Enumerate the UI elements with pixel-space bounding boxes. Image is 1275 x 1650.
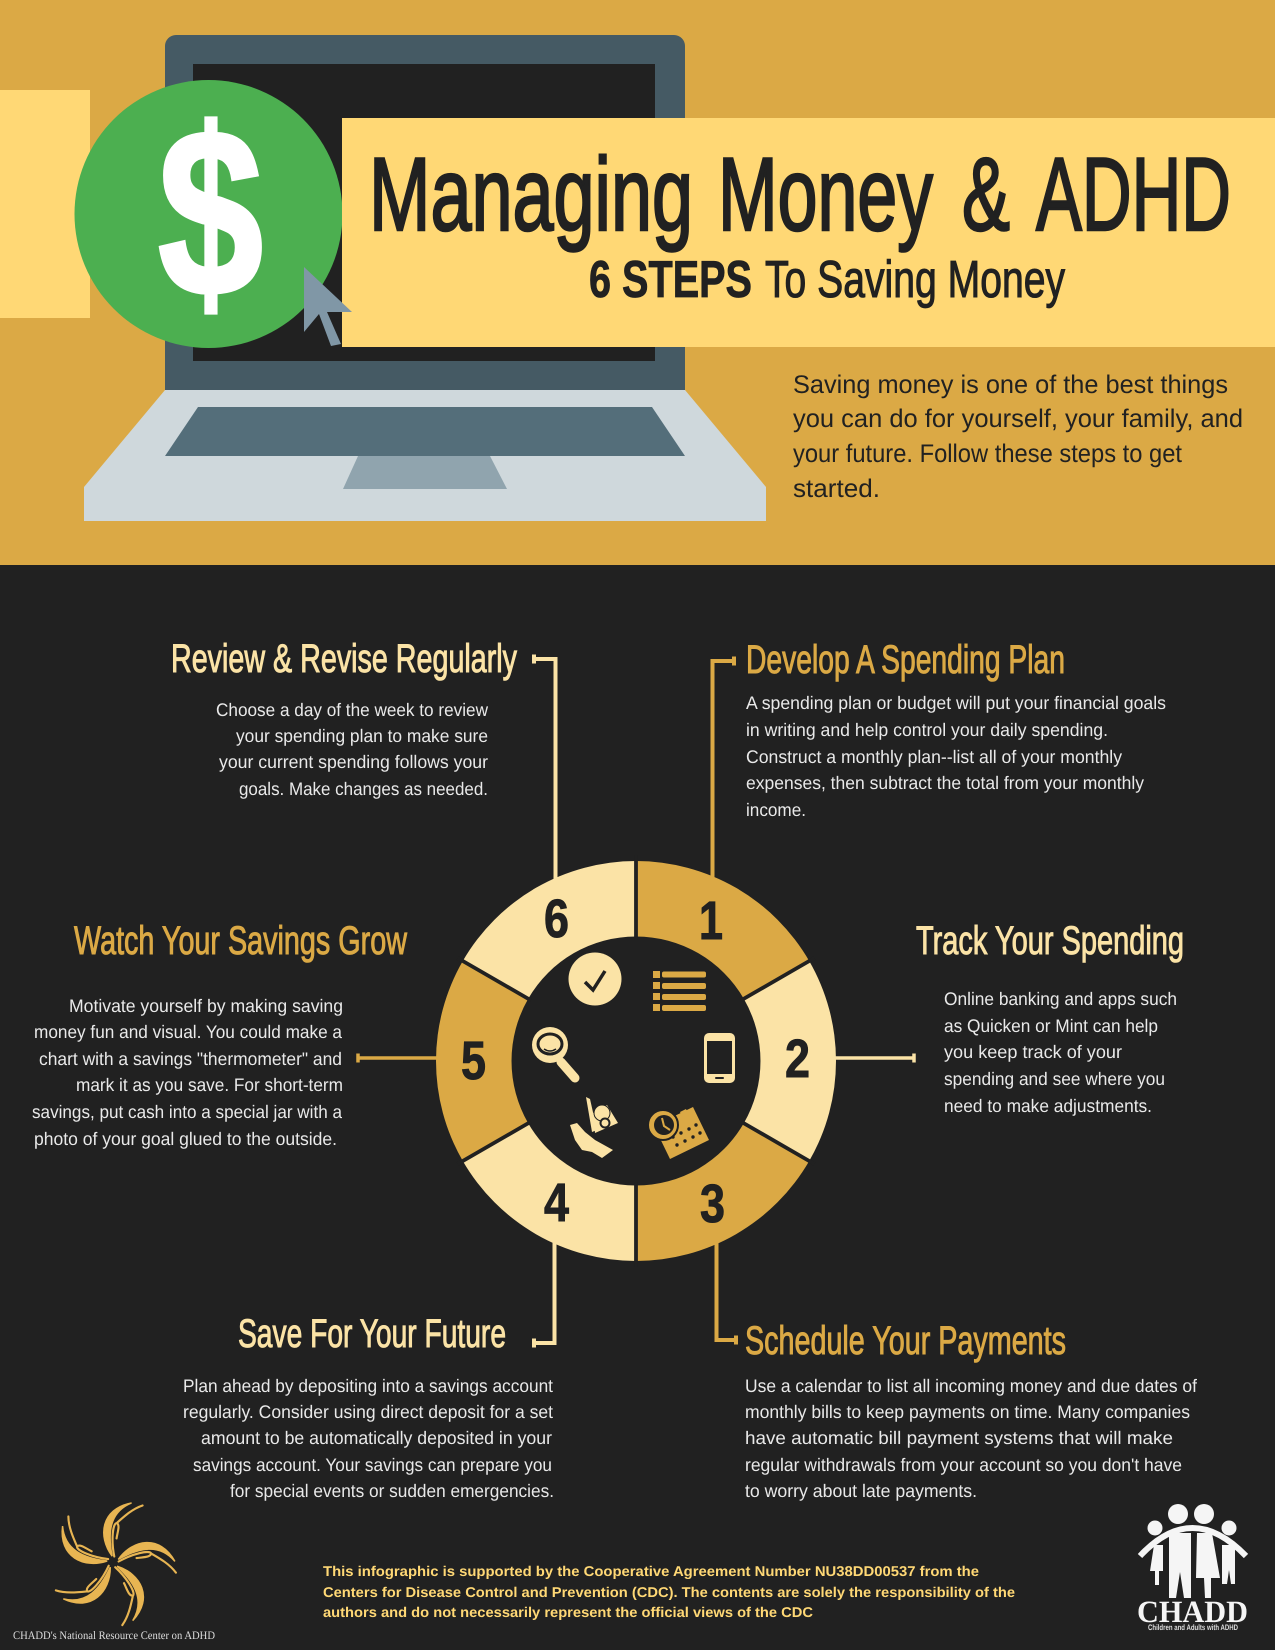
body: review: your current spending follows your: [219, 752, 488, 772]
panel: step 5 savings: [32, 919, 442, 1149]
segment 2: [744, 961, 836, 1161]
segment 1: [636, 861, 809, 999]
body: develop: Construct a monthly plan--list all of your monthly: [746, 747, 1123, 767]
body: review: [216, 700, 489, 799]
body: schedule: have automatic bill payment systems that will make: [745, 1428, 1173, 1448]
segment 6: [463, 861, 636, 999]
heading: schedule: Schedule Your Payments: [745, 1319, 1066, 1363]
body: review: Choose a day of the week to review: [216, 700, 489, 720]
icon: list: [653, 971, 706, 1011]
body: develop: in writing and help control your daily spending.: [746, 720, 1108, 740]
panel: step 3 schedule: [716, 1238, 1198, 1501]
body: review: your spending plan to make sure: [236, 726, 488, 746]
body: develop: A spending plan or budget will put your financial goals: [746, 693, 1166, 713]
body: track: Online banking and apps such: [944, 989, 1177, 1009]
body: watch savings: savings, put cash into a special jar with a: [32, 1102, 343, 1122]
body: watch savings: [32, 996, 343, 1149]
logo: CHADD: [1137, 1504, 1248, 1632]
body: future: amount to be automatically deposited in your: [201, 1428, 552, 1448]
left accent block: [0, 90, 90, 318]
number 4: 4: [544, 1173, 569, 1233]
body: review: goals. Make changes as needed.: [239, 779, 488, 799]
connector 1: [712, 656, 734, 885]
number 5: 5: [461, 1031, 486, 1091]
body: schedule: regular withdrawals from your account so you don't have: [745, 1455, 1182, 1475]
heading: develop: Develop A Spending Plan: [746, 638, 1065, 682]
footer disclaimer: authors and do not necessarily represent the official views of the CDC: [323, 1605, 813, 1621]
title banner: [342, 118, 1275, 347]
intro text: you can do for yourself, your family, and: [793, 405, 1243, 433]
heading: track: Track Your Spending: [916, 919, 1184, 963]
body: future: [183, 1376, 554, 1501]
icon: laptop: [84, 35, 766, 521]
logo: CHADD national resource center: [13, 1500, 215, 1642]
body: watch savings: chart with a savings "thermometer" and: [39, 1049, 342, 1069]
body: watch savings: Motivate yourself by making saving: [69, 996, 343, 1016]
body: track: spending and see where you: [944, 1069, 1165, 1089]
icon: check mark: [568, 952, 622, 1006]
panel: step 4 future: [183, 1238, 554, 1501]
connector 3: [716, 1238, 737, 1344]
chart: six step ring: [436, 855, 836, 1267]
CHADD wordmark: CHADD: [1137, 1594, 1248, 1629]
body: develop: income.: [746, 800, 806, 820]
connector 5: [357, 1054, 442, 1062]
segment 3: [636, 1123, 809, 1261]
body: track: as Quicken or Mint can help: [944, 1016, 1158, 1036]
body: future: savings account. Your savings can prepare you: [193, 1455, 552, 1475]
body: future: regularly. Consider using direct deposit for a set: [183, 1402, 553, 1422]
footer disclaimer: Centers for Disease Control and Prevention (CDC). The contents are solely the responsibility of the: [323, 1585, 1015, 1601]
body: track: you keep track of your: [944, 1042, 1122, 1062]
icon: green dollar coin: $: [158, 81, 263, 346]
title: &: [962, 137, 1010, 253]
heading: future: Save For Your Future: [238, 1312, 506, 1356]
heading: watch savings: Watch Your Savings Grow: [74, 919, 407, 963]
header panel: [0, 0, 1275, 565]
heading: review and revise: Review & Revise Regularly: [171, 637, 517, 681]
segment 4: [463, 1123, 636, 1261]
panel: step 2 track: [830, 919, 1184, 1116]
family figures: [1140, 1504, 1246, 1598]
body: develop: expenses, then subtract the total from your monthly: [746, 773, 1145, 793]
body: schedule: [745, 1376, 1198, 1501]
panel: step 1 develop: [712, 638, 1166, 885]
subtitle bold part: 6 STEPS: [589, 251, 752, 309]
body: watch savings: money fun and visual. You could make a: [34, 1022, 343, 1042]
header background: [0, 0, 1275, 565]
body: track: [944, 989, 1177, 1116]
subtitle regular part: To Saving Money: [765, 251, 1065, 309]
number 6: 6: [544, 889, 569, 949]
body: future: for special events or sudden emergencies.: [230, 1481, 554, 1501]
icon: magnifier: [532, 1027, 575, 1078]
icon: cursor arrow: [304, 267, 352, 346]
intro text: [793, 371, 1243, 503]
body: track: need to make adjustments.: [944, 1096, 1152, 1116]
intro text: Saving money is one of the best things: [793, 371, 1228, 399]
connector 2: [830, 1054, 915, 1062]
logo caption: CHADD's National Resource Center on ADHD: [13, 1630, 215, 1642]
swirl mark: [54, 1500, 181, 1629]
panel: step 6 review: [171, 637, 556, 885]
connector 4: [534, 1238, 554, 1348]
body: schedule: to worry about late payments.: [745, 1481, 977, 1501]
icon: hand holding photo: [570, 1097, 618, 1158]
footer disclaimer: [323, 1564, 1015, 1621]
number 1: 1: [699, 891, 723, 951]
intro text: started.: [793, 475, 880, 503]
title: Managing: [369, 137, 693, 253]
body: watch savings: mark it as you save. For short-term: [76, 1075, 343, 1095]
body: develop: [746, 693, 1166, 820]
connector 6: [534, 654, 556, 885]
body: schedule: Use a calendar to list all incoming money and due dates of: [745, 1376, 1198, 1396]
segment 5: [436, 961, 528, 1161]
footer disclaimer: This infographic is supported by the Cooperative Agreement Number NU38DD00537 from the: [323, 1564, 979, 1580]
icon: green dollar coin: [74, 80, 342, 348]
icon: calendar and clock: [648, 1107, 709, 1159]
title: [369, 137, 1231, 253]
number 3: 3: [700, 1174, 725, 1234]
CHADD tagline: Children and Adults with ADHD: [1148, 1623, 1238, 1632]
icon: phone: [704, 1033, 735, 1083]
body: watch savings: photo of your goal glued to the outside.: [34, 1129, 337, 1149]
body: schedule: monthly bills to keep payments on time. Many companies: [745, 1402, 1190, 1422]
intro text: your future. Follow these steps to get: [793, 440, 1182, 468]
number 2: 2: [785, 1029, 810, 1089]
title: Money: [718, 137, 933, 253]
body: future: Plan ahead by depositing into a savings account: [183, 1376, 553, 1396]
